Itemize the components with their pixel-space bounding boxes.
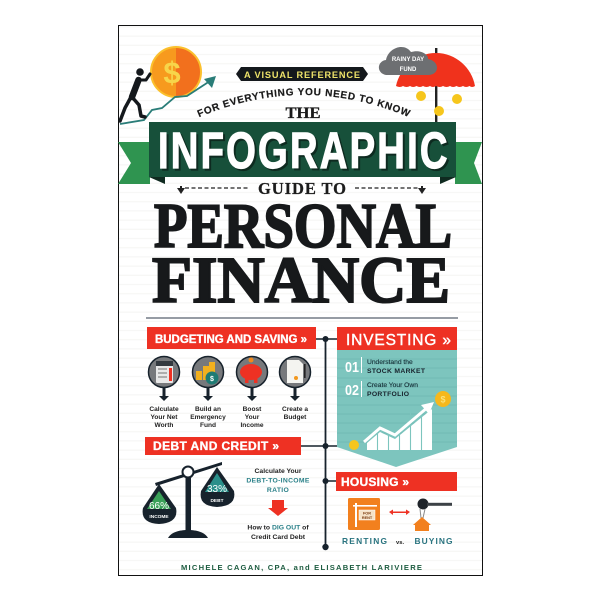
label: renting vs. buying: RENTING: [342, 536, 387, 546]
title: FINANCE: FINANCE: [152, 244, 450, 317]
label: renting vs. buying: [342, 536, 452, 546]
heading: debt and credit: DEBT AND CREDIT »: [153, 439, 279, 453]
heading: debt and credit: [145, 437, 301, 455]
text: dig out of credit card debt: [247, 524, 309, 541]
icon: coin stacks and money bag: $: [210, 376, 214, 383]
icon: for rent sign: [348, 498, 380, 530]
title: PERSONAL: PERSONAL: [154, 191, 452, 261]
arrow: red down: [268, 500, 288, 516]
label: calculate your net worth: Worth: [155, 422, 173, 429]
label: boost your income: Your: [245, 414, 260, 421]
right pan: 33% debt: DEBT: [210, 498, 224, 504]
label: create a budget: Budget: [284, 414, 307, 421]
heading: housing: [336, 472, 457, 491]
text: debt-to-income ratio: RATIO: [267, 487, 289, 494]
label: renting vs. buying: vs.: [396, 540, 404, 546]
icon: rainy day umbrella: RAINY DAY: [392, 57, 424, 63]
icon: budget document: [280, 356, 310, 401]
list item 01: Understand the: [367, 359, 413, 366]
icon: for rent sign: FOR: [363, 512, 371, 516]
subtitle: GUIDE TO with arrows: [177, 179, 426, 198]
title banner: INFOGRAPHIC: INFOGRAPHIC: [160, 124, 450, 181]
word: THE: THE: [286, 105, 320, 122]
label: calculate your net worth: Calculate: [149, 406, 179, 413]
label: calculate your net worth: [149, 406, 179, 429]
icon: coin pushed by climbing man: [120, 47, 216, 124]
icon: rainy day umbrella: FUND: [400, 67, 417, 73]
left pan: 66% income: [143, 484, 176, 524]
arrow: double headed: [389, 510, 410, 515]
icon: key and house: [413, 498, 452, 531]
icon: piggy bank: [236, 356, 268, 401]
label: build an emergency fund: Fund: [200, 422, 216, 429]
icon: for rent sign: RENT: [362, 516, 373, 520]
label: build an emergency fund: Build an: [195, 406, 221, 413]
subtitle: GUIDE TO with arrows: GUIDE TO: [258, 179, 346, 198]
label: calculate your net worth: Your Net: [150, 414, 178, 421]
chart: debt to income scale: [143, 462, 234, 538]
heading: housing: HOUSING »: [341, 475, 409, 489]
left pan: 66% income: 66%: [149, 501, 169, 512]
label: create a budget: Create a: [282, 406, 308, 413]
text: debt-to-income ratio: Calculate Your: [255, 468, 302, 475]
label: create a budget: [282, 406, 308, 421]
icon: rainy day umbrella: [379, 47, 475, 123]
text: dig out of credit card debt: How to DIG OUT of: [247, 524, 309, 532]
list item 02: 02: [345, 382, 359, 399]
icon: coin stacks and money bag: [192, 356, 224, 401]
list item 02: Create Your Own: [367, 382, 418, 389]
right pan: 33% debt: 33%: [207, 484, 227, 495]
chart: rising bars and arrow: [364, 402, 434, 450]
label: boost your income: Boost: [243, 406, 262, 413]
label: boost your income: Income: [240, 422, 264, 429]
icon: coin pushed by climbing man: $: [163, 55, 181, 90]
panel: investing: [337, 327, 457, 467]
badge: A VISUAL REFERENCE: A VISUAL REFERENCE: [244, 70, 360, 80]
text: debt-to-income ratio: [246, 468, 310, 494]
left pan: 66% income: INCOME: [149, 514, 169, 520]
label: renting vs. buying: BUYING: [414, 536, 452, 546]
icon: calculator: [148, 356, 180, 401]
authors: MICHELE CAGAN, CPA, and ELISABETH LARIVIERE: [181, 563, 422, 572]
title banner: INFOGRAPHIC: INFOGRAPHIC: [158, 122, 448, 179]
right pan: 33% debt: [201, 467, 234, 507]
badge: A VISUAL REFERENCE: [236, 67, 368, 81]
connector timeline: [301, 336, 337, 550]
label: build an emergency fund: [190, 406, 226, 429]
book cover background: [118, 26, 482, 576]
text: dig out of credit card debt: Credit Card Debt: [251, 534, 306, 541]
list item 01: STOCK MARKET: [367, 368, 426, 375]
icon: gold coins: $: [440, 394, 446, 404]
list item 02: [345, 381, 418, 399]
label: boost your income: [240, 406, 264, 429]
arched tagline: FOR EVERYTHING YOU NEED TO KNOW: [196, 88, 411, 118]
heading: budgeting and saving: BUDGETING AND SAVING »: [155, 334, 307, 346]
list item 01: 01: [345, 359, 359, 376]
heading: investing: INVESTING »: [346, 332, 451, 349]
label: build an emergency fund: Emergency: [190, 414, 226, 421]
list item 01: [345, 357, 426, 376]
text: debt-to-income ratio: DEBT-TO-INCOME: [246, 478, 310, 484]
heading: budgeting and saving: [147, 327, 316, 349]
list item 02: PORTFOLIO: [367, 391, 409, 398]
